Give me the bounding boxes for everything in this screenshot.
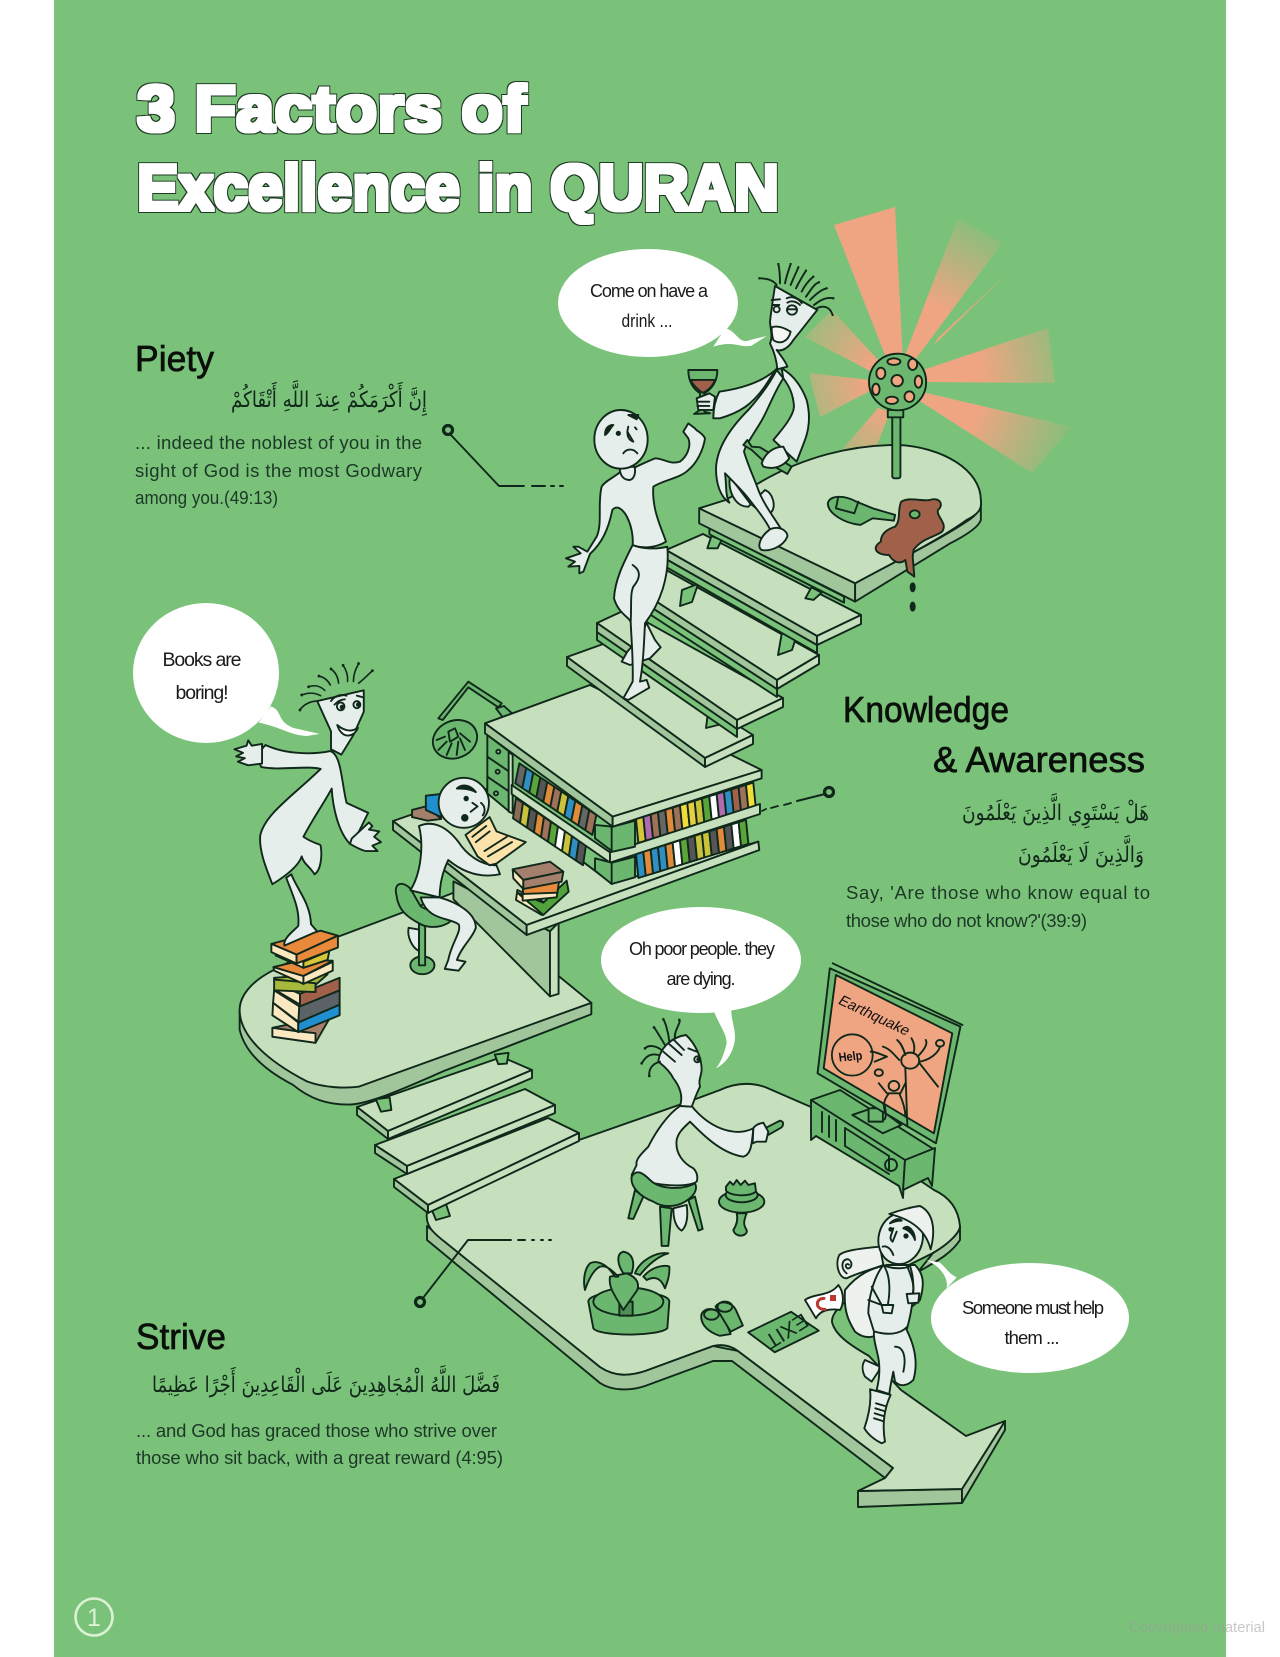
book stack on desk	[513, 862, 569, 915]
figure: backpack man	[805, 1206, 957, 1443]
right shelf board and end blocks	[595, 804, 760, 884]
text block: Strive: فَضَّلَ اللَّهُ الْمُجَاهِدِينَ عَلَى الْقَاعِدِينَ أَجْرًا عَظِيمًا	[152, 1365, 500, 1398]
desk top	[393, 789, 758, 925]
icon: side table with plant	[719, 1180, 764, 1236]
speech bubble: someone must help them	[931, 1263, 1129, 1373]
icon: bedroll	[837, 1247, 883, 1278]
text block: Knowledge and Awareness	[843, 689, 1150, 931]
desk items behind head	[412, 794, 441, 821]
speech bubble: oh poor people: Oh poor people. they	[629, 939, 775, 959]
text block: Strive	[136, 1316, 503, 1468]
pointer: Knowledge	[762, 788, 834, 811]
text block: Piety: among you.(49:13)	[135, 487, 278, 508]
page number: 1	[87, 1604, 101, 1632]
speech bubble: come on have a drink	[558, 249, 738, 357]
lower stairs	[357, 1057, 579, 1220]
text block: Strive: Strive	[136, 1316, 226, 1357]
tv screen drawing	[832, 1034, 944, 1127]
speech bubble: come on have a drink: drink ...	[622, 311, 672, 331]
TV set	[818, 963, 962, 1143]
speech bubble: someone must help them: Someone must help	[962, 1297, 1104, 1318]
title: Excellence in QURAN	[137, 151, 779, 224]
icon: backpack	[845, 1265, 923, 1337]
icon: exit sign	[748, 1312, 819, 1352]
copyright watermark: Copyrighted material	[1129, 1619, 1265, 1636]
tv screen text: help: Help	[838, 1049, 863, 1065]
text block: Knowledge and Awareness: those who do not know?'(39:9)	[846, 910, 1087, 931]
icon: wine stain and drops	[876, 499, 944, 611]
books: lower left row	[513, 798, 586, 865]
head and hat	[873, 1208, 929, 1269]
text block: Knowledge and Awareness: Say, 'Are those who know equal to	[846, 882, 1150, 903]
text block: Knowledge and Awareness: Knowledge	[843, 689, 1009, 730]
desk and bookshelf unit	[393, 682, 762, 935]
speech bubble: books are boring: Books are	[162, 649, 242, 671]
pointer: Strive	[416, 1240, 551, 1306]
icon: wine glass	[688, 370, 717, 414]
figure: man with wine	[688, 263, 834, 550]
drawers	[487, 735, 513, 813]
bottom platform with exit arrow	[427, 1084, 1005, 1507]
icon: red crescent flag	[805, 1285, 843, 1318]
text block: Piety: إِنَّ أَكْرَمَكُمْ عِندَ اللَّهِ أَتْقَاكُمْ	[231, 380, 427, 417]
desk leg	[453, 881, 559, 996]
icon: boot	[864, 1389, 891, 1443]
icon: desk lamp	[427, 682, 517, 765]
text block: Knowledge and Awareness: & Awareness	[933, 739, 1145, 780]
icon: open book	[465, 817, 526, 865]
books: upper right row	[636, 783, 756, 843]
book stack under foot	[271, 931, 340, 1043]
icon: potted plant	[584, 1252, 669, 1335]
text block: Knowledge and Awareness: هَلْ يَسْتَوِي الَّذِينَ يَعْلَمُونَ	[962, 793, 1149, 829]
light rays behind lamp	[805, 207, 1072, 483]
text block: Knowledge and Awareness: وَالَّذِينَ لَا يَعْلَمُونَ	[1018, 835, 1144, 868]
speech bubble: oh poor people	[601, 907, 801, 1013]
icon: stool	[396, 884, 457, 974]
speech bubble: books are boring	[133, 603, 279, 743]
books: upper left row	[515, 763, 596, 835]
tv screen text: earthquake: Earthquake	[835, 993, 913, 1039]
icon: lamp post	[869, 354, 926, 478]
speech bubble: come on have a drink: Come on have a	[590, 281, 709, 301]
icon: stool	[628, 1190, 703, 1246]
text block: Piety: ... indeed the noblest of you in the	[135, 432, 422, 453]
middle platform	[240, 892, 591, 1112]
head	[758, 263, 834, 369]
icon: fallen bottle	[828, 497, 895, 525]
icon: slippers	[701, 1302, 743, 1336]
books: lower right row	[636, 820, 748, 878]
figure: student reading at desk	[396, 778, 526, 974]
figure: man standing on books	[234, 662, 381, 1043]
floor items: slippers and exit sign	[701, 1302, 819, 1352]
text block: Strive: ... and God has graced those who strive over	[136, 1420, 497, 1441]
pointer: Piety	[444, 426, 563, 486]
text block: Piety: sight of God is the most Godwary	[135, 460, 423, 481]
icon: bottle in hand	[743, 440, 792, 474]
top platform with lamp, bottle and wine stain	[699, 354, 981, 611]
TV stand	[811, 1090, 935, 1198]
upper stairs	[567, 534, 861, 767]
speech bubble: oh poor people: are dying.	[666, 969, 736, 989]
left shelf board	[512, 785, 610, 863]
title: 3 Factors of	[137, 72, 526, 145]
text block: Piety: Piety	[135, 338, 214, 379]
text block: Strive: those who sit back, with a great reward (4:95)	[136, 1447, 503, 1468]
page number	[76, 1598, 112, 1636]
speech bubble: someone must help them: them ...	[1004, 1327, 1060, 1348]
speech bubble: books are boring: boring!	[176, 682, 228, 704]
text block: Piety	[135, 338, 427, 508]
title	[137, 72, 779, 224]
exit sign text: EXIT	[760, 1308, 812, 1353]
shelf top	[485, 685, 762, 817]
figure: man watching tv on stool	[584, 1007, 783, 1335]
figure: worried man on stairs	[566, 410, 705, 700]
